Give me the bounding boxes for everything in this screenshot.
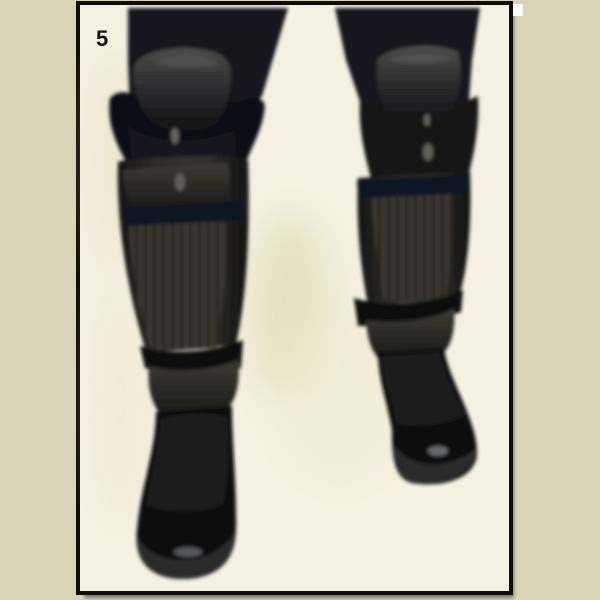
trousers xyxy=(335,8,480,116)
shin guard body xyxy=(118,156,249,352)
left leg with armor xyxy=(109,8,288,579)
knee side wrap xyxy=(360,96,478,182)
right leg with armor xyxy=(335,8,480,484)
boot xyxy=(378,348,477,484)
panel: photo frame xyxy=(78,3,523,598)
shin top plate xyxy=(123,163,230,208)
strap xyxy=(122,200,244,226)
knee cap xyxy=(133,48,231,131)
panel number: 5 xyxy=(96,26,108,51)
shin guard body xyxy=(357,172,470,305)
ankle plate xyxy=(366,308,455,358)
strap xyxy=(357,174,468,198)
ankle strap xyxy=(140,340,243,375)
lower knee buckle strap xyxy=(128,125,236,162)
ankle plate xyxy=(148,360,239,414)
ribbed shin xyxy=(129,222,226,352)
boot xyxy=(136,406,236,579)
knee cap xyxy=(376,46,461,124)
knee guard side wrap xyxy=(109,92,265,176)
ankle strap xyxy=(354,290,463,326)
trousers xyxy=(128,8,288,115)
ribbed shin xyxy=(372,194,453,300)
floor shadows xyxy=(97,50,400,520)
